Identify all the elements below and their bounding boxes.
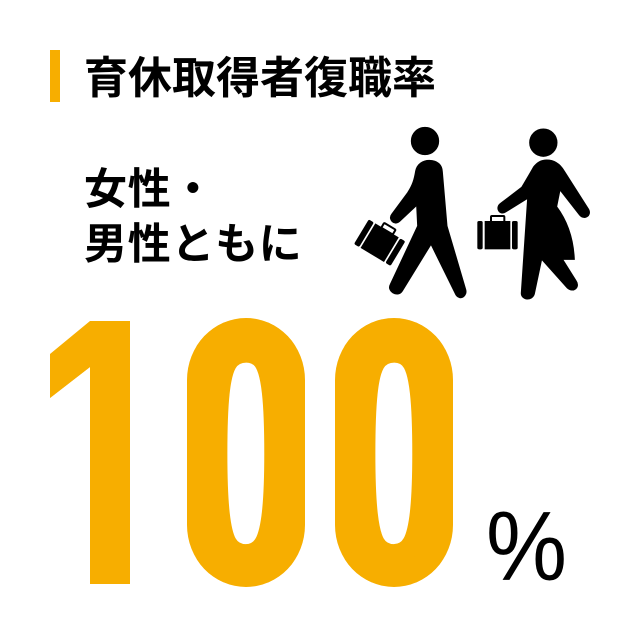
- percent sign: %: [486, 491, 567, 601]
- subtitle: women and men: 男性ともに: [84, 221, 302, 269]
- subtitle: women and men: 女性・: [84, 166, 215, 214]
- subtitle: women and men: [84, 166, 302, 269]
- big number 100: [50, 318, 453, 587]
- icon: man walking with briefcase: [354, 127, 466, 298]
- icon: woman walking with briefcase: [477, 129, 589, 299]
- heading accent bar: [50, 50, 60, 102]
- title: 育休取得者復職率: [84, 54, 436, 103]
